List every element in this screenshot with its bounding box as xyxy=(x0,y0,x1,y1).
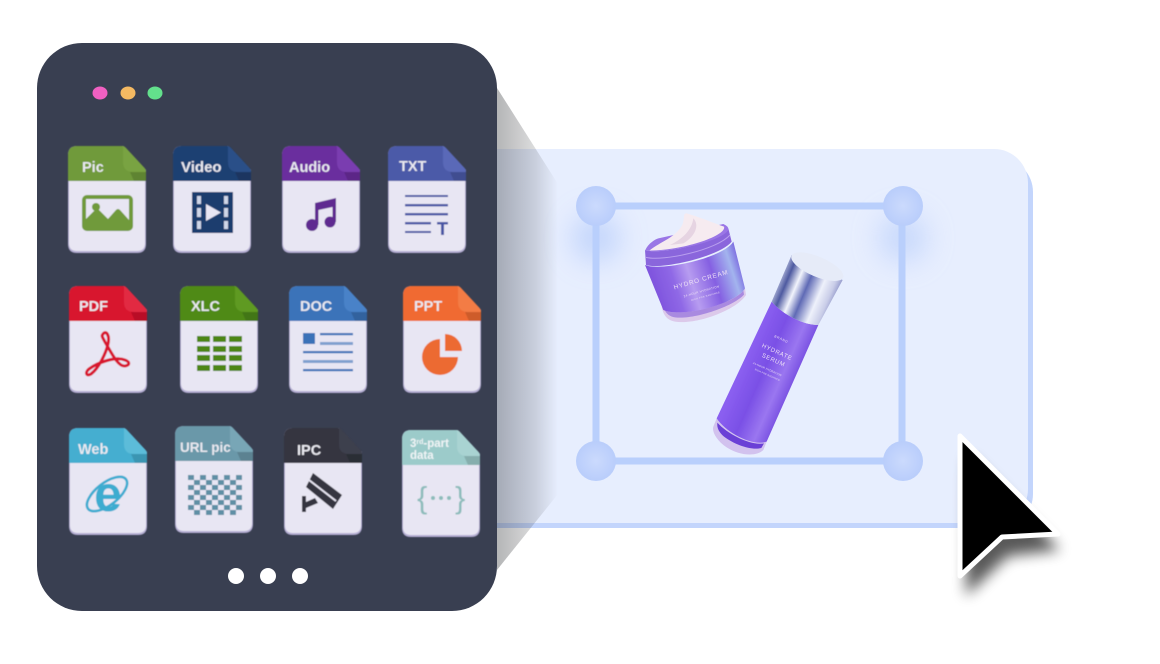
file icon: Pic: Pic xyxy=(82,160,104,176)
file icon: third-party data: { xyxy=(417,480,427,515)
file icon: PPT: PPT xyxy=(414,299,442,315)
product: serum bottle: BRAND xyxy=(774,334,789,344)
file icon: DOC xyxy=(289,286,367,393)
pagination dots xyxy=(228,568,308,584)
file icon: PDF: PDF xyxy=(79,299,108,315)
file icon: IPC: IPC xyxy=(297,443,322,459)
product: serum bottle xyxy=(713,247,847,454)
file icon: Web: e xyxy=(94,466,122,522)
file icon: URL pic: URL pic xyxy=(180,440,231,455)
selection frame with handles xyxy=(572,186,927,481)
product: cream jar: HYDRO CREAM xyxy=(673,269,729,291)
file icon: Video xyxy=(173,146,251,253)
file icon: Video: Video xyxy=(181,159,222,176)
file icon: Pic xyxy=(68,146,146,253)
product: cream jar xyxy=(645,213,746,322)
file icon: TXT xyxy=(388,146,466,253)
file icon: URL pic xyxy=(175,426,253,533)
product: serum bottle: HYDRATE xyxy=(761,343,793,362)
product: serum bottle: 24-HOUR HYDRATION xyxy=(752,361,782,377)
cursor arrow xyxy=(960,436,1060,596)
product: serum bottle: SERUM xyxy=(761,353,786,369)
file icon: DOC: DOC xyxy=(300,299,333,315)
file icon: PPT xyxy=(403,286,481,393)
panel: dark file window xyxy=(37,43,497,611)
file icon: Audio xyxy=(282,146,360,253)
product: serum bottle: RICH FOR RADIANCE xyxy=(754,368,781,382)
file icon: TXT: TXT xyxy=(399,159,427,175)
file icon: PDF xyxy=(69,286,147,393)
file icon: third-party data: } xyxy=(455,480,465,515)
file icon: third-party data: rd xyxy=(416,439,423,446)
file icon: Web xyxy=(69,428,147,535)
file icon: third-party data: data xyxy=(410,450,434,462)
file icon: XLC xyxy=(180,286,258,393)
product: cream jar: RICH FOR RADIANCE xyxy=(691,291,721,302)
product: cream jar: 24-HOUR HYDRATION xyxy=(683,284,720,298)
file icon: XLC: XLC xyxy=(191,299,221,315)
panel: blue canvas xyxy=(440,149,1033,528)
file icon: Audio: Audio xyxy=(289,160,330,176)
projection shadow wedge xyxy=(497,88,558,570)
file icon: Web: Web xyxy=(78,442,108,458)
window dots xyxy=(92,86,162,100)
file icon: third-party data: -part xyxy=(423,438,449,450)
file icon: third-party data xyxy=(402,430,480,537)
file icon: IPC xyxy=(284,428,362,535)
file icon: third-party data: 3 xyxy=(410,438,416,450)
